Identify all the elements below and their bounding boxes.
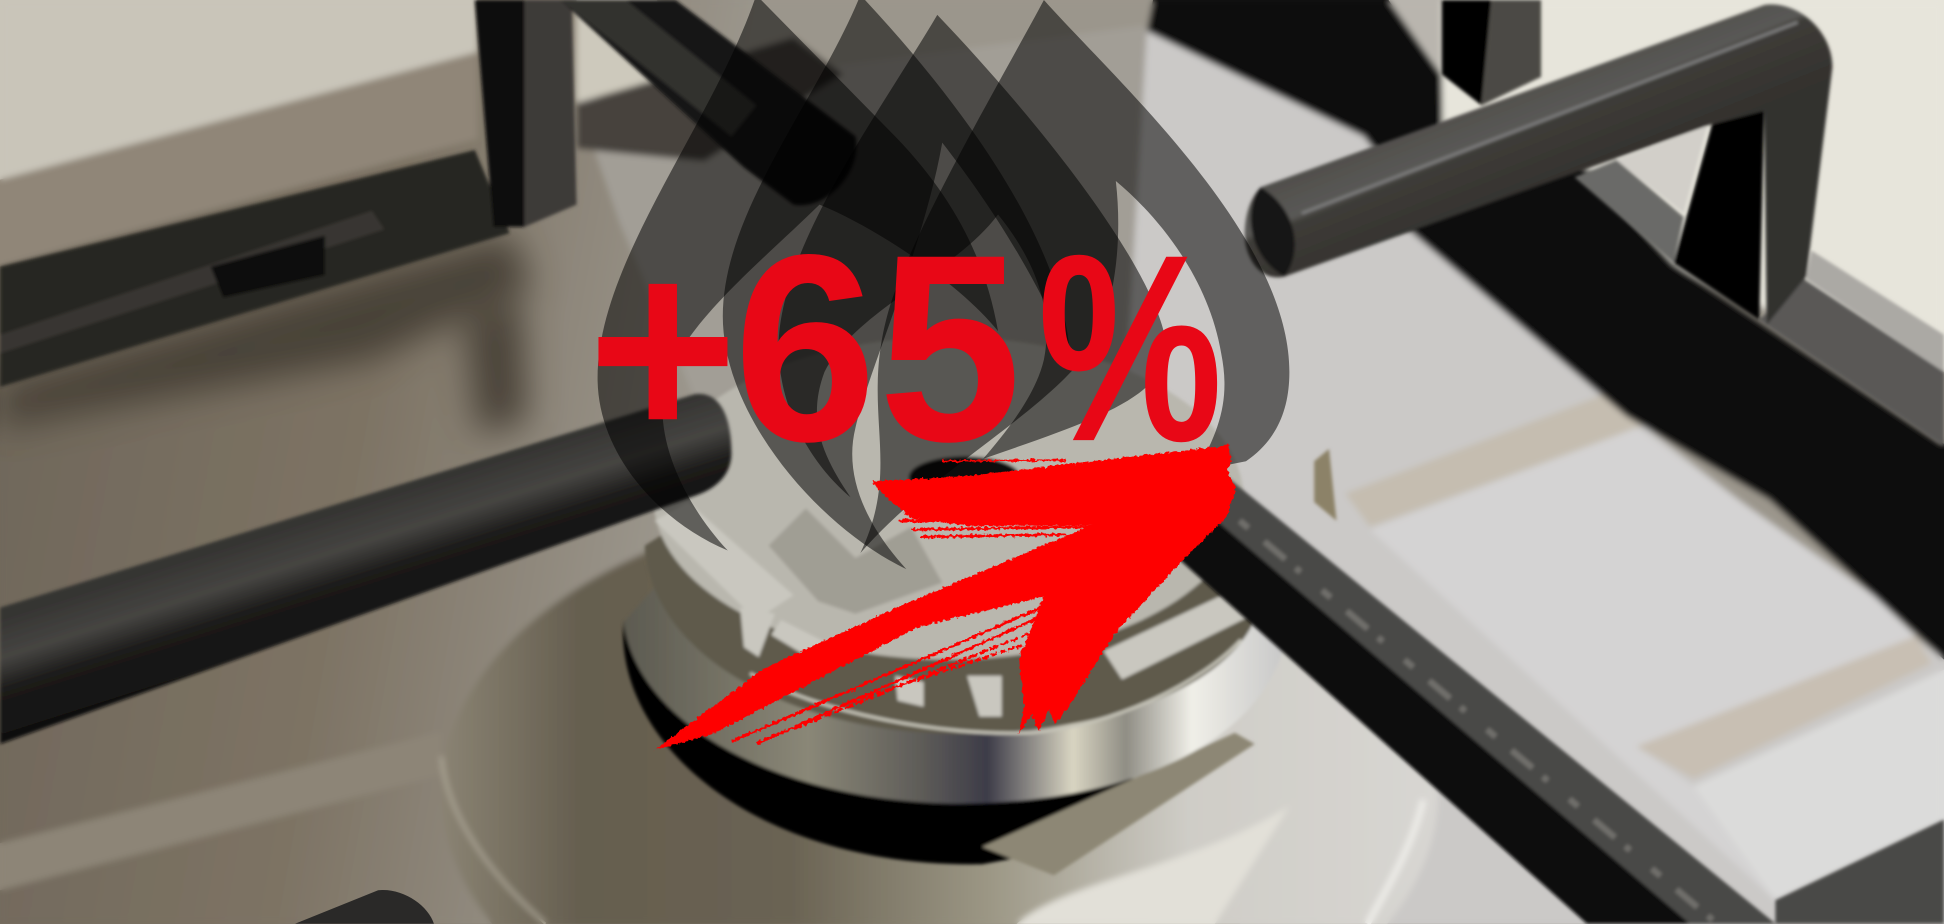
grate: upper left arm bbox=[0, 0, 856, 387]
flame: middle right crescent bbox=[779, 15, 1167, 497]
burner base ring bbox=[624, 570, 1284, 803]
pan inner piece bbox=[982, 733, 1255, 875]
grate: lower right arm bbox=[1178, 477, 1944, 924]
crown rim line bbox=[750, 640, 1241, 733]
cap centre shadow bbox=[909, 456, 1020, 498]
grate: bottom left foot bbox=[295, 890, 434, 924]
headline: +65%: +65 bbox=[588, 199, 1021, 497]
headline: +65% bbox=[588, 199, 1223, 497]
cream wedge behind top rail bbox=[577, 0, 676, 102]
countertop top right bbox=[1389, 0, 1944, 372]
lower light panel bbox=[1370, 428, 1944, 900]
headline: +65%: % bbox=[1038, 199, 1223, 497]
icon: translucent gas flame bbox=[598, 0, 1289, 569]
left lower stripe bbox=[0, 732, 441, 890]
burner bbox=[623, 337, 1336, 875]
dark rail behind top arm bbox=[577, 37, 843, 161]
lower black band bbox=[1401, 155, 1944, 660]
upper reflective strip bbox=[1345, 382, 1655, 527]
top middle surface bbox=[577, 25, 1364, 620]
flame: right crescent bbox=[860, 0, 1289, 553]
arrow: rising red brush stroke bbox=[655, 444, 1236, 750]
lower reflective strip bbox=[1637, 636, 1932, 779]
grate: upper right arm bbox=[1245, 0, 1944, 446]
pan highlight bbox=[441, 756, 546, 924]
burner teeth bbox=[655, 502, 1255, 717]
upper black band bbox=[1147, 0, 1444, 242]
flame: left crescent bbox=[598, 0, 998, 551]
burner cap block bbox=[769, 508, 942, 614]
right steel surface bbox=[1116, 31, 1944, 924]
flame: middle left crescent bbox=[723, 0, 1070, 569]
igniter pin bbox=[1314, 449, 1336, 521]
countertop top left bbox=[0, 0, 477, 180]
arrow: brush streaks bbox=[731, 460, 1091, 744]
burner cap bbox=[653, 337, 1244, 660]
shadow below burner bbox=[623, 620, 1172, 864]
grate: lower left arm bbox=[0, 394, 731, 744]
steel edge top left bbox=[0, 52, 477, 267]
drip pan bbox=[441, 495, 1438, 924]
burner crown bbox=[645, 484, 1255, 734]
grime below left rail bbox=[0, 233, 533, 434]
